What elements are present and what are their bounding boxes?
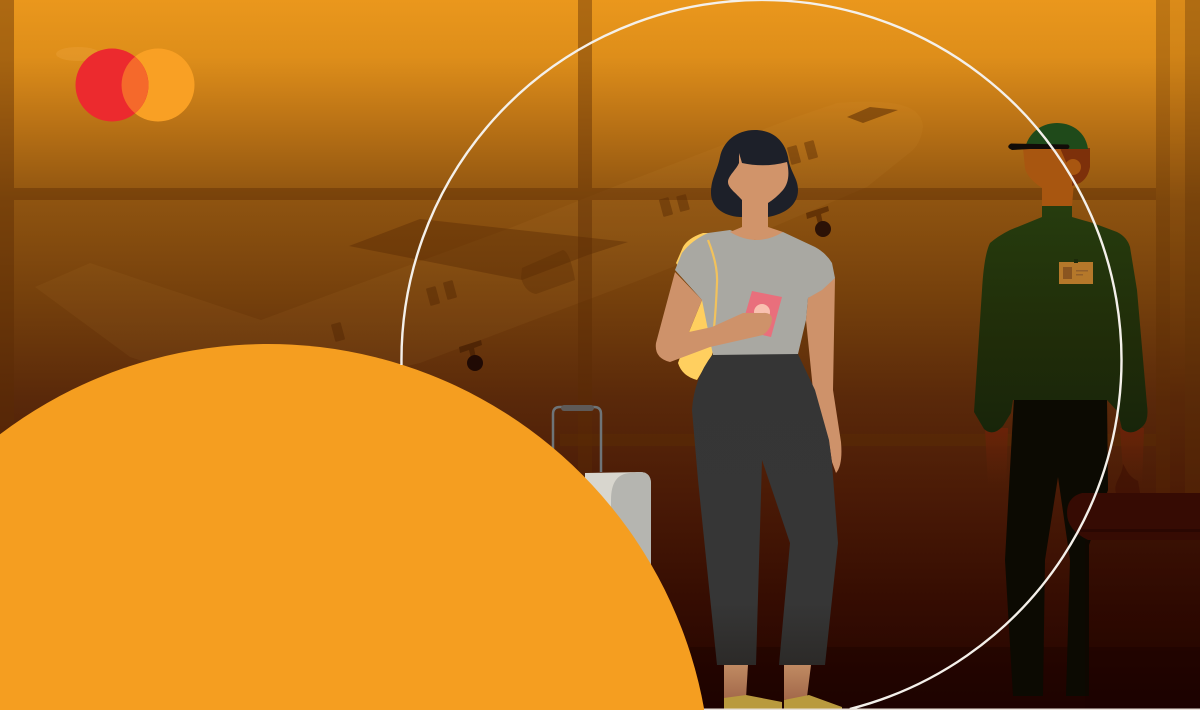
- woman shoes: [724, 695, 782, 708]
- woman t-shirt: [675, 230, 835, 355]
- woman near arm and hand: [656, 272, 772, 362]
- landing gear: [459, 206, 831, 371]
- backpack strap: [708, 240, 717, 328]
- passport: [745, 291, 782, 337]
- plane main wing: [349, 219, 628, 280]
- suitcase body: [585, 472, 651, 600]
- woman hair: [711, 130, 798, 217]
- man trousers: [1005, 398, 1108, 696]
- floor band: [690, 647, 1200, 710]
- man back of head: [1060, 148, 1090, 186]
- man hands: [985, 428, 1008, 486]
- man neck and face: [1023, 148, 1075, 206]
- backpack: [676, 233, 723, 380]
- man cap: [1025, 123, 1088, 149]
- plane engine: [521, 250, 575, 294]
- window frames: [0, 0, 1200, 500]
- plane windows: [331, 140, 818, 342]
- woman far arm: [806, 278, 841, 473]
- white ring outline: [401, 0, 1121, 709]
- plane fuselage: [35, 102, 923, 400]
- bottom edge line: [704, 708, 1200, 710]
- suitcase handle: [553, 407, 601, 472]
- table with bag: [1067, 464, 1200, 710]
- airplane silhouette: [35, 102, 923, 400]
- woman trousers: [692, 354, 838, 665]
- man ear: [1065, 159, 1081, 175]
- woman legs: [724, 665, 748, 700]
- man jacket: [974, 206, 1148, 432]
- woman face and neck: [728, 153, 788, 240]
- logo: two overlapping circles: [56, 47, 194, 122]
- suitcase: [553, 405, 651, 600]
- man: airport staff: [974, 123, 1148, 696]
- plane upper wing: [847, 107, 898, 123]
- woman: traveller: [656, 130, 842, 708]
- man cap brim: [1008, 144, 1070, 150]
- large orange circle: [0, 344, 704, 710]
- man id badge: [1059, 259, 1093, 284]
